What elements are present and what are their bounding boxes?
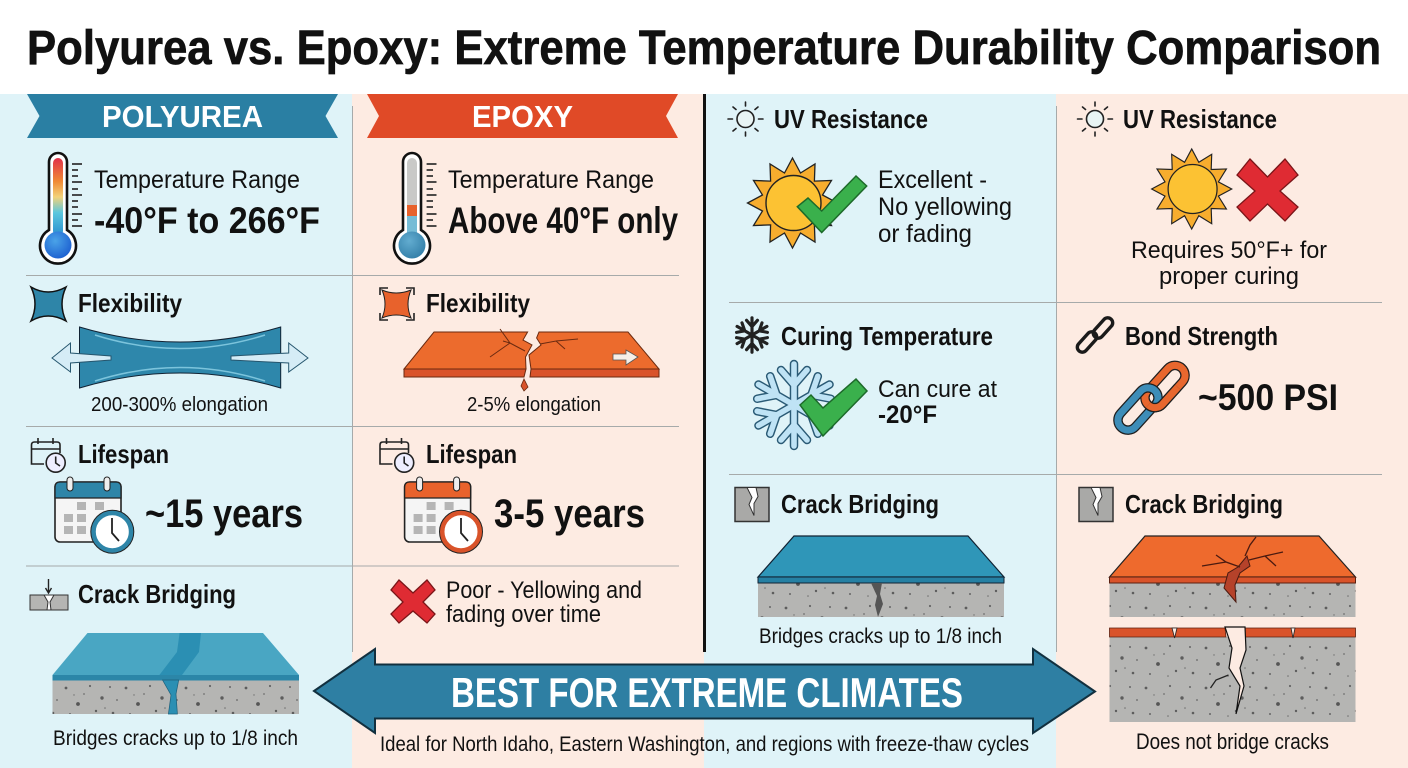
banner: polyurea: POLYUREA: [102, 99, 263, 134]
elongation caption: 2-5% elongation: [467, 394, 601, 416]
curing temperature heading: Curing Temperature: [781, 321, 993, 351]
curing requirement text: proper curing: [1159, 263, 1299, 290]
panel: epoxy column right: [1056, 94, 1408, 768]
icon: calendar and clock: [55, 477, 134, 553]
poor uv text: fading over time: [446, 601, 601, 628]
callout caption: Ideal for North Idaho, Eastern Washington, and regions with freeze-thaw cycles: [380, 732, 1029, 756]
bridging caption: Bridges cracks up to 1/8 inch: [53, 726, 298, 750]
lifespan heading: Lifespan: [426, 439, 517, 469]
no bridging caption: Does not bridge cracks: [1136, 729, 1329, 754]
polyurea column content: [27, 94, 338, 750]
icon: crack square: [735, 488, 769, 522]
uv resistance heading: UV Resistance: [774, 104, 928, 134]
illustration: cracked epoxy slab: [404, 329, 659, 391]
banner: epoxy: EPOXY: [472, 99, 573, 134]
banner: polyurea: [27, 94, 338, 138]
title banner: [0, 0, 1408, 94]
icon: flexibility: [31, 287, 66, 321]
epoxy right column content: [1075, 102, 1356, 754]
flexibility heading: Flexibility: [78, 288, 182, 318]
illustration: stretched polyurea band: [52, 327, 308, 388]
curing text: [878, 376, 997, 429]
icon: low-range thermometer: [394, 153, 436, 264]
icon: chain links: [1114, 361, 1189, 434]
temperature range text: Above 40°F only: [448, 200, 678, 241]
icon: small snowflake: [734, 318, 770, 352]
illustration: cracked epoxy top: [1110, 536, 1356, 617]
temperature range text: Temperature Range: [94, 166, 300, 194]
elongation caption: 200-300% elongation: [91, 394, 268, 416]
curing text: -20°F: [878, 401, 937, 429]
icon: sun with check: [748, 158, 867, 248]
icon: small calendar: [32, 438, 65, 472]
icon: crack bridging small: [30, 579, 68, 610]
lifespan value: ~15 years: [145, 492, 303, 536]
poor uv text: [446, 577, 642, 628]
epoxy column content: [367, 94, 678, 628]
uv text: [878, 166, 1012, 248]
icon: small calendar: [380, 438, 414, 472]
icon: uv sun outline: [1078, 102, 1112, 136]
crack bridging heading: Crack Bridging: [781, 489, 939, 519]
temperature range text: [448, 166, 678, 241]
icon: flexibility brittle: [380, 288, 414, 320]
crack bridging heading: Crack Bridging: [78, 579, 236, 609]
callout heading: BEST FOR EXTREME CLIMATES: [451, 669, 963, 716]
icon: snowflake with check: [752, 364, 867, 446]
illustration: polyurea over crack: [758, 536, 1004, 617]
flexibility heading: Flexibility: [426, 288, 530, 318]
bond strength heading: Bond Strength: [1125, 321, 1278, 351]
polyurea right column content: [728, 102, 1012, 648]
panel: epoxy column left: [352, 94, 704, 768]
lifespan value: 3-5 years: [494, 492, 645, 536]
callout arrow: best for extreme climates: [314, 649, 1095, 733]
icon: sun with x: [1152, 149, 1298, 229]
panel: polyurea column right: [704, 94, 1056, 768]
illustration: polyurea bridging slab: [52, 633, 299, 714]
uv text: or fading: [878, 220, 972, 248]
icon: small chain: [1075, 316, 1115, 354]
poor uv text: Poor - Yellowing and: [446, 577, 642, 604]
icon: red x: [391, 580, 435, 623]
curing requirement text: [1131, 237, 1327, 290]
icon: rainbow thermometer: [40, 153, 82, 264]
panel: polyurea column left: [0, 94, 352, 768]
temperature range text: [94, 166, 320, 241]
bridging caption: Bridges cracks up to 1/8 inch: [759, 624, 1002, 648]
uv text: No yellowing: [878, 193, 1012, 221]
icon: calendar and clock: [405, 477, 482, 553]
icon: crack square: [1079, 488, 1113, 522]
lifespan heading: Lifespan: [78, 439, 169, 469]
icon: uv sun outline: [728, 102, 763, 136]
curing requirement text: Requires 50°F+ for: [1131, 237, 1327, 264]
bond strength value: ~500 PSI: [1198, 377, 1338, 418]
uv resistance heading: UV Resistance: [1123, 104, 1277, 134]
temperature range text: Temperature Range: [448, 166, 654, 194]
curing text: Can cure at: [878, 376, 997, 403]
crack bridging heading: Crack Bridging: [1125, 489, 1283, 519]
illustration: epoxy failure section: [1110, 627, 1356, 722]
temperature range text: -40°F to 266°F: [94, 200, 320, 241]
banner: epoxy: [367, 94, 678, 138]
uv text: Excellent -: [878, 166, 987, 194]
